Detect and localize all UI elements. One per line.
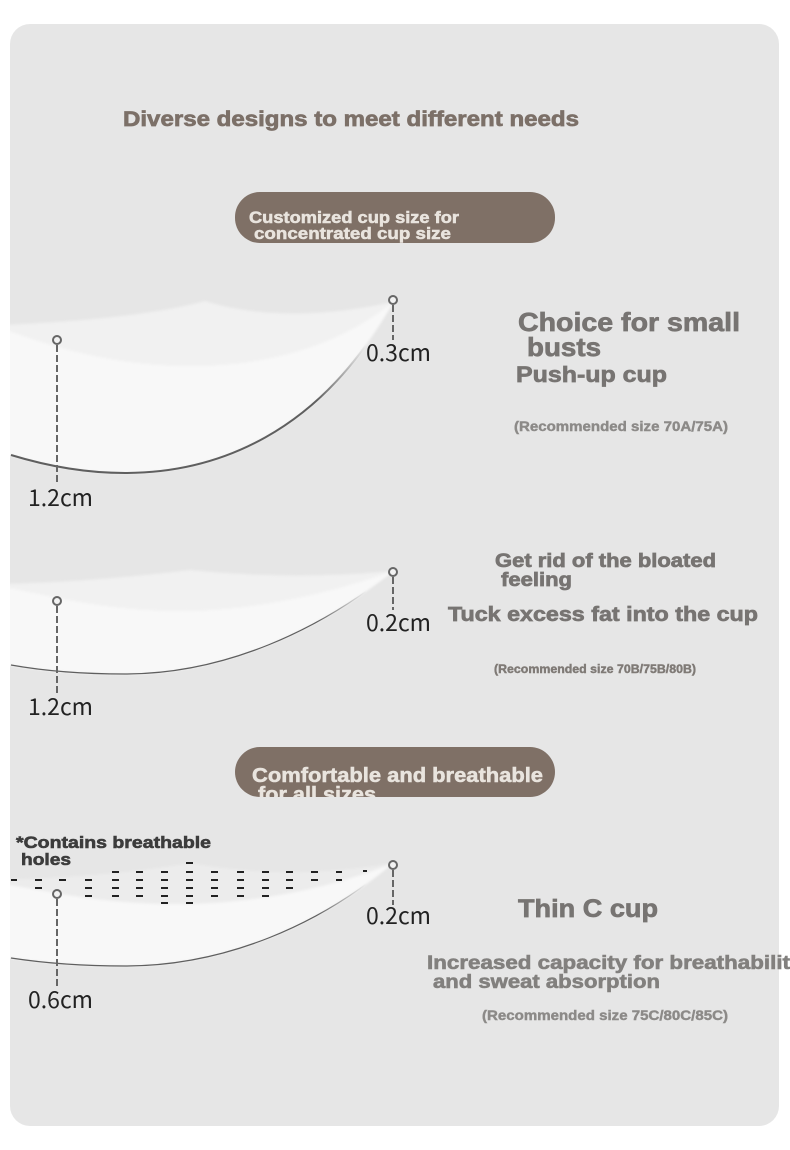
recommended size: (Recommended size 70B/75B/80B): [494, 662, 696, 676]
text block: get rid of the bloated feeling: [448, 551, 758, 676]
increased capacity: Increased capacity for breathabilit: [427, 953, 790, 974]
thickness marker right: [367, 860, 429, 924]
section pill: comfortable and breathable: [235, 747, 555, 797]
thickness marker right: [367, 567, 429, 632]
cup back layer: [4, 863, 393, 966]
cup back layer: [10, 571, 381, 610]
pill text: for all sizes: [258, 784, 376, 806]
cup front layer: [4, 863, 393, 966]
cup bottom edge: [10, 348, 364, 474]
push-up cup: Push-up cup: [516, 362, 667, 387]
thickness marker left: 1.2cm: [28, 688, 93, 722]
breathable holes: [11, 863, 367, 903]
text block: choice for small busts: busts: [527, 332, 601, 362]
cup front layer: [148, 310, 387, 471]
increased capacity: and sweat absorption: [433, 972, 660, 993]
cup diagram: thin C cup with holes: [4, 861, 431, 1015]
thickness marker left: [28, 890, 93, 1015]
cup bottom edge: [10, 593, 364, 675]
thickness marker right: 0.2cm: [366, 897, 431, 931]
cup diagram: tuck cup: [4, 568, 431, 722]
recommended size: (Recommended size 75C/80C/85C): [482, 1007, 728, 1023]
pill text: Comfortable and breathable: [252, 765, 543, 787]
thickness marker left: [30, 596, 91, 716]
text block: get rid of the bloated feeling: feeling: [501, 570, 572, 591]
title: Diverse designs to meet different needs: [123, 108, 579, 131]
text block: thin C cup: Thin C cup: [518, 895, 658, 923]
cup bottom edge: [10, 886, 364, 967]
recommended size: (Recommended size 70A/75A): [514, 418, 728, 434]
text block: get rid of the bloated feeling: Get rid of the bloated: [495, 551, 716, 572]
pill text: Customized cup size for: [249, 209, 460, 227]
cup back layer: [10, 302, 388, 365]
note: contains breathable holes: holes: [21, 850, 71, 869]
text block: choice for small busts: Choice for small: [518, 307, 740, 337]
thickness marker right: 0.3cm: [366, 334, 431, 368]
thickness marker left: 1.2cm: [28, 479, 93, 513]
note: contains breathable holes: *Contains breathable: [16, 833, 211, 852]
cup diagram: push-up cup: [4, 296, 431, 513]
thickness marker right: 0.2cm: [366, 604, 431, 638]
section pill: customized cup size: [235, 192, 555, 243]
tuck excess fat: Tuck excess fat into the cup: [448, 604, 758, 626]
text block: thin C cup: [427, 895, 790, 1023]
thickness marker left: [28, 336, 93, 513]
text block: choice for small busts: [514, 307, 740, 434]
cup front layer: [162, 577, 384, 671]
pill text: concentrated cup size: [254, 225, 451, 243]
thickness marker right: [367, 295, 429, 362]
thickness marker left: 0.6cm: [28, 981, 93, 1015]
